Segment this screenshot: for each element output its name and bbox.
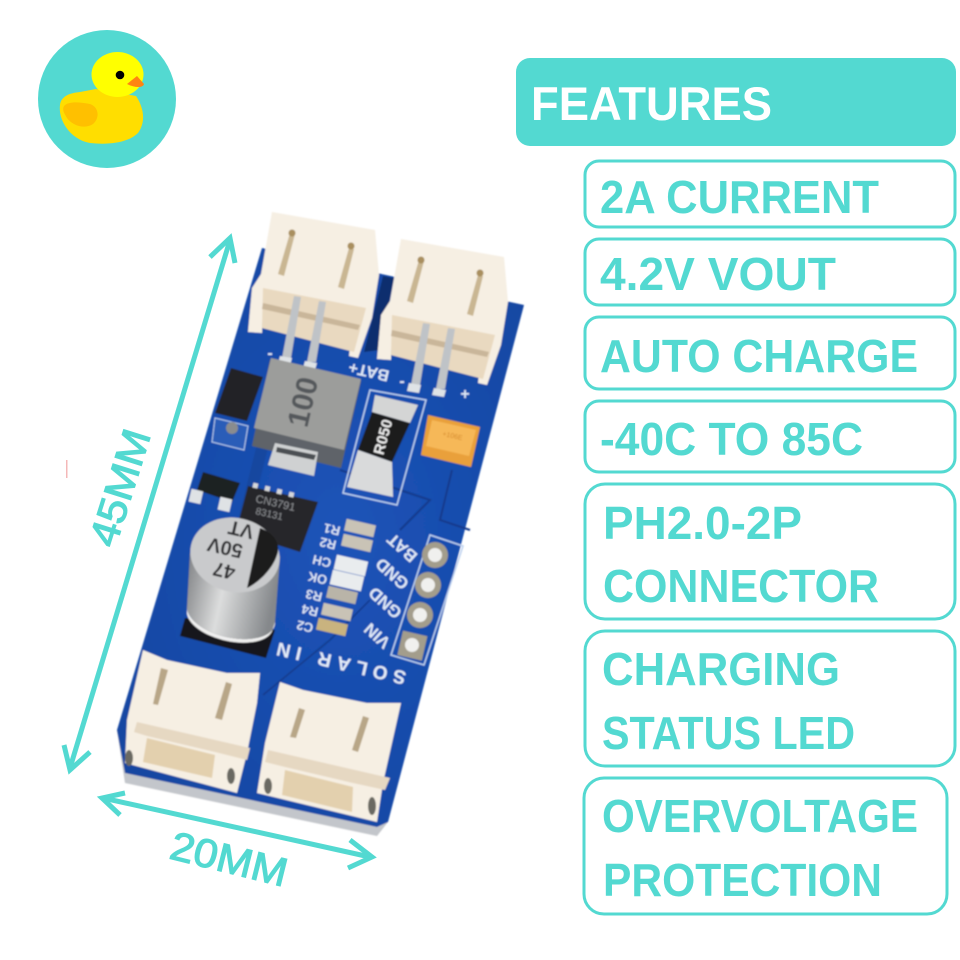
pin header pads [391,535,463,665]
status LEDs and resistors column: CH [311,552,333,571]
dimension label: 45MM: 45MM [82,424,160,552]
feature: 2A current [585,161,955,227]
logo: duck badge [38,30,176,168]
dimension label: 20MM: 20MM [166,824,292,896]
board [117,248,524,827]
status LEDs and resistors column: R3 [304,586,324,605]
feature: PH2.0-2P connector: PH2.0-2P [603,497,802,549]
icon: duck wing [63,102,98,127]
silkscreen: polarity marks [267,345,470,403]
connector: top left [248,212,379,370]
feature: overvoltage protection: PROTECTION [603,854,882,906]
silkscreen: pin labels: GND [365,583,406,622]
inductor [252,358,361,476]
transistor SOT [189,472,240,512]
status LEDs and resistors column [295,519,376,636]
electrolytic capacitor [180,509,287,658]
feature: auto charge: AUTO CHARGE [600,330,918,382]
silkscreen: polarity marks: + [460,386,470,403]
IC CN3791: CN3791 [254,493,296,514]
feature: auto charge [585,317,955,389]
diode [212,368,263,450]
tantalum capacitor: +106E [442,431,463,442]
silkscreen: pin labels: GND [372,554,413,593]
feature: PH2.0-2P connector: CONNECTOR [603,560,879,612]
board edge [117,730,388,836]
feature: overvoltage protection [584,778,947,914]
silkscreen: BAT+ label: BAT+ [347,358,391,384]
feature: overvoltage protection: OVERVOLTAGE [602,790,918,842]
connector: bottom left [125,650,260,793]
IC CN3791 [236,483,318,552]
IC CN3791: 83131 [254,506,284,523]
heading panel: FEATURES [516,58,956,146]
tantalum capacitor [421,415,480,467]
silkscreen: polarity marks: - [399,373,405,390]
feature: charging status LED: CHARGING [602,643,840,695]
decorative red mark [66,460,68,478]
silkscreen: pin labels [360,529,421,652]
icon: duck body [60,89,143,144]
feature: temperature range: -40C TO 85C [600,413,863,465]
feature: charging status LED [585,631,955,766]
gap shadow between top connectors [364,276,394,352]
connector: top right [377,239,508,397]
icon: duck eye [116,71,124,79]
feature: temperature range [585,401,955,472]
inductor: 100 [282,374,325,430]
resistor R050 [343,390,426,505]
arrow: 45mm dimension [64,238,235,770]
status LEDs and resistors column: R1 [322,520,342,539]
electrolytic capacitor: 47 [211,557,238,583]
feature: 4.2V Vout [585,239,955,305]
product photo: solar charger PCB [117,212,524,836]
resistor R050: R050 [371,418,396,457]
silkscreen: pin labels: VIN [360,619,394,652]
feature: charging status LED: STATUS LED [602,707,855,759]
electrolytic capacitor: VT [226,515,256,543]
connector: bottom right [257,682,401,822]
status LEDs and resistors column: OK [306,569,329,588]
silkscreen: pin labels: BAT [383,529,421,566]
feature: PH2.0-2P connector [585,484,955,619]
status LEDs and resistors column: C2 [295,617,315,636]
icon: duck beak [127,76,144,87]
heading panel: FEATURES: FEATURES [531,77,772,130]
icon: duck head [92,52,144,97]
silkscreen: SOLAR IN: SOLAR IN [275,637,408,688]
status LEDs and resistors column: R4 [299,601,320,620]
silkscreen: polarity marks: - [267,345,273,362]
electrolytic capacitor: 50V [205,532,245,562]
status LEDs and resistors column: R2 [318,534,338,553]
feature: 2A current: 2A CURRENT [600,171,879,223]
feature: 4.2V Vout: 4.2V VOUT [600,248,836,300]
arrow: 20mm dimension [102,793,372,868]
